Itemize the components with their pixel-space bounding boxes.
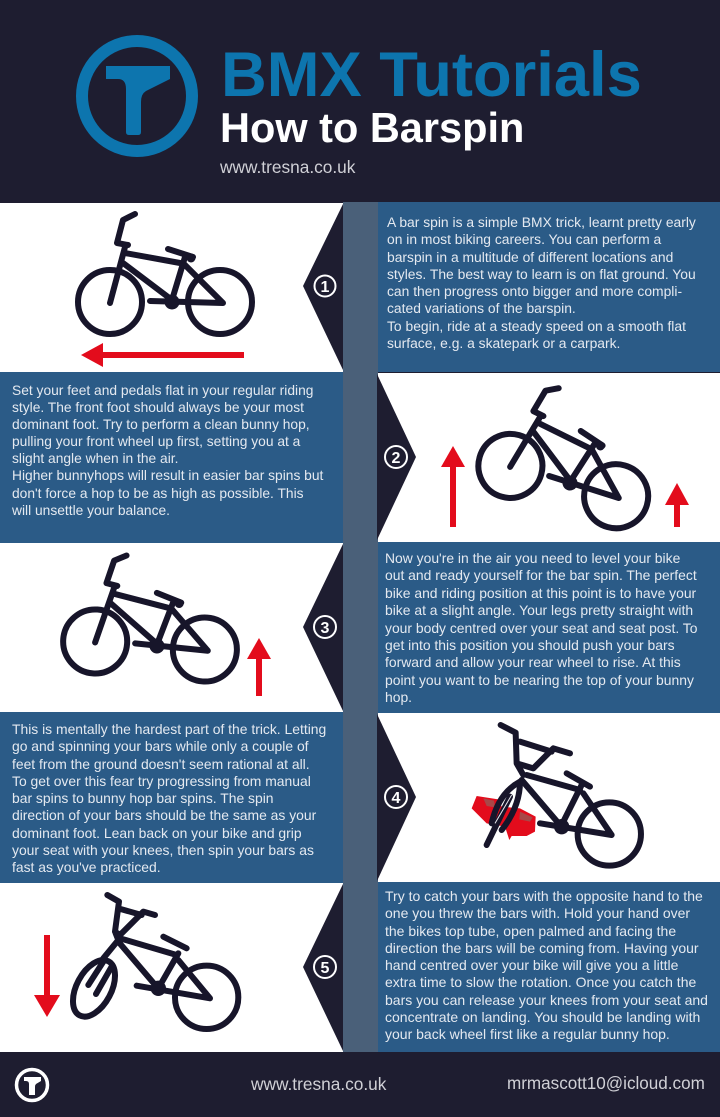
panel: step 3 text bbox=[378, 542, 720, 713]
icon: header logo bbox=[82, 41, 192, 151]
step 2 text: slight angle when in the air. bbox=[12, 451, 178, 466]
step 4 text: go and spinning your bars while only a couple of bbox=[12, 738, 309, 754]
step 2 text: dominant foot. Try to perform a clean bunny hop, bbox=[12, 417, 310, 432]
step 5 text: one you threw the bars with. Hold your hand over bbox=[385, 905, 690, 921]
chevron: step 3: 3 bbox=[321, 620, 330, 637]
chevron: step 1 bbox=[303, 204, 343, 370]
chevron: step 5: 5 bbox=[321, 960, 330, 977]
step 5 text: extra time to slow the rotation. Once you catch the bbox=[385, 974, 696, 990]
header url: www.tresna.co.uk bbox=[220, 157, 355, 177]
icon: bike step 4 bbox=[472, 725, 641, 866]
step 5 text: concentrate on landing. You should be landing with bbox=[385, 1009, 700, 1025]
step 3 text: hop. bbox=[385, 689, 412, 705]
panel: step 1 text bbox=[378, 202, 720, 372]
panel: step 4 image bbox=[378, 713, 720, 882]
arrow: up rear bbox=[665, 483, 689, 527]
step 1 text: barspin in a multitude of different locations and bbox=[387, 248, 673, 264]
step 1 text: on in most biking careers. You can perform a bbox=[387, 231, 661, 247]
header band bbox=[0, 0, 720, 202]
step 5 text: the bikes top tube, open palmed and facing the bbox=[385, 922, 676, 938]
centre strip bbox=[343, 202, 378, 1052]
chevron: step 4: 4 bbox=[392, 790, 401, 807]
step 1 text: cated variations of the barspin. bbox=[387, 300, 576, 316]
step 5 text: your back wheel first like a regular bunny hop. bbox=[385, 1026, 670, 1042]
step 5 text: bars you can release your knees from your seat and bbox=[385, 992, 708, 1008]
step 1 text: A bar spin is a simple BMX trick, learnt pretty early bbox=[387, 214, 696, 230]
panel: step 2 text bbox=[0, 372, 343, 543]
step 3 text: bike at a slight angle. Your legs pretty straight with bbox=[385, 602, 693, 618]
step 4 text: This is mentally the hardest part of the trick. Letting bbox=[12, 721, 326, 737]
step 4 text: feet from the ground doesn't seem rational at all. bbox=[12, 756, 310, 772]
chevron: step 4 bbox=[377, 714, 416, 881]
step 3 text: out and ready yourself for the bar spin. The perfect bbox=[385, 567, 697, 583]
panel: step 4 text bbox=[0, 712, 343, 883]
step 3 text: get into this position you should push your bars bbox=[385, 637, 675, 653]
chevron: step 3 bbox=[303, 544, 343, 711]
step 3 text: your body centred over your seat and seat post. To bbox=[385, 620, 697, 636]
panel: step 5 image bbox=[0, 883, 343, 1052]
arrow: down bbox=[34, 935, 60, 1017]
step 3 text bbox=[385, 550, 697, 705]
subtitle: How to Barspin bbox=[220, 104, 524, 151]
icon: bike step 1 bbox=[78, 214, 252, 334]
step 2 text bbox=[12, 383, 324, 518]
step 5 text bbox=[385, 888, 708, 1042]
arrow: left bbox=[81, 343, 244, 367]
step 4 text: bar spins to bunny hop bar spins. The spin bbox=[12, 790, 274, 806]
step 4 text bbox=[12, 721, 326, 875]
arrow: up rear step 3 bbox=[247, 638, 271, 696]
step 2 text: don't force a hop to be as high as possible. This bbox=[12, 486, 304, 501]
chevron: step 1: 1 bbox=[321, 279, 330, 296]
step 1 text: To begin, ride at a steady speed on a smooth flat bbox=[387, 318, 686, 334]
step 3 text: forward and allow your rear wheel to rise. At this bbox=[385, 654, 681, 670]
step 4 text: dominant foot. Lean back on your bike and grip bbox=[12, 824, 302, 840]
step 4 text: direction of your bars should be the same as your bbox=[12, 807, 316, 823]
icon: bike step 3 bbox=[61, 551, 243, 684]
chevron: step 2 bbox=[377, 374, 416, 540]
step 2 text: Set your feet and pedals flat in your regular riding bbox=[12, 383, 313, 398]
icon: bike step 5 bbox=[64, 895, 238, 1029]
step 5 text: Try to catch your bars with the opposite hand to the bbox=[385, 888, 703, 904]
step 1 text bbox=[387, 214, 696, 351]
step 4 text: To get over this fear try progressing from manual bbox=[12, 773, 311, 789]
panel: step 5 text bbox=[378, 882, 720, 1052]
step 3 text: bike and riding position at this point is to have your bbox=[385, 585, 696, 601]
step 1 text: can then progress onto bigger and more compli- bbox=[387, 283, 682, 299]
panel: step 2 image bbox=[378, 373, 720, 542]
step 2 text: style. The front foot should always be your most bbox=[12, 400, 304, 415]
step 4 text: your seat with your knees, then spin your bars as bbox=[12, 842, 314, 858]
step 3 text: point you want to be nearing the top of your bunny bbox=[385, 672, 694, 688]
step 2 text: will unsettle your balance. bbox=[12, 503, 170, 518]
step 5 text: hand centred over your bike will give you a little bbox=[385, 957, 678, 973]
step 5 text: direction the bars will be coming from. Having your bbox=[385, 940, 699, 956]
icon: footer logo bbox=[16, 1070, 48, 1100]
title: BMX Tutorials bbox=[221, 40, 642, 110]
chevron: step 5 bbox=[303, 884, 343, 1051]
step 1 text: surface, e.g. a skatepark or a carpark. bbox=[387, 335, 620, 351]
footer url: www.tresna.co.uk bbox=[251, 1074, 386, 1094]
step 3 text: Now you're in the air you need to level your bike bbox=[385, 550, 680, 566]
footer email: mrmascott10@icloud.com bbox=[507, 1074, 705, 1093]
panel: step 1 image bbox=[0, 203, 343, 372]
panel: step 3 image bbox=[0, 543, 343, 712]
arrow: up front bbox=[441, 446, 465, 527]
step 4 text: fast as you've practiced. bbox=[12, 859, 161, 875]
step 1 text: styles. The best way to learn is on flat ground. You bbox=[387, 266, 696, 282]
chevron: step 2: 2 bbox=[392, 450, 401, 467]
step 2 text: Higher bunnyhops will result in easier bar spins but bbox=[12, 468, 323, 483]
icon: bike step 2 bbox=[471, 372, 671, 536]
step 2 text: pulling your front wheel up first, setting you at a bbox=[12, 434, 300, 449]
